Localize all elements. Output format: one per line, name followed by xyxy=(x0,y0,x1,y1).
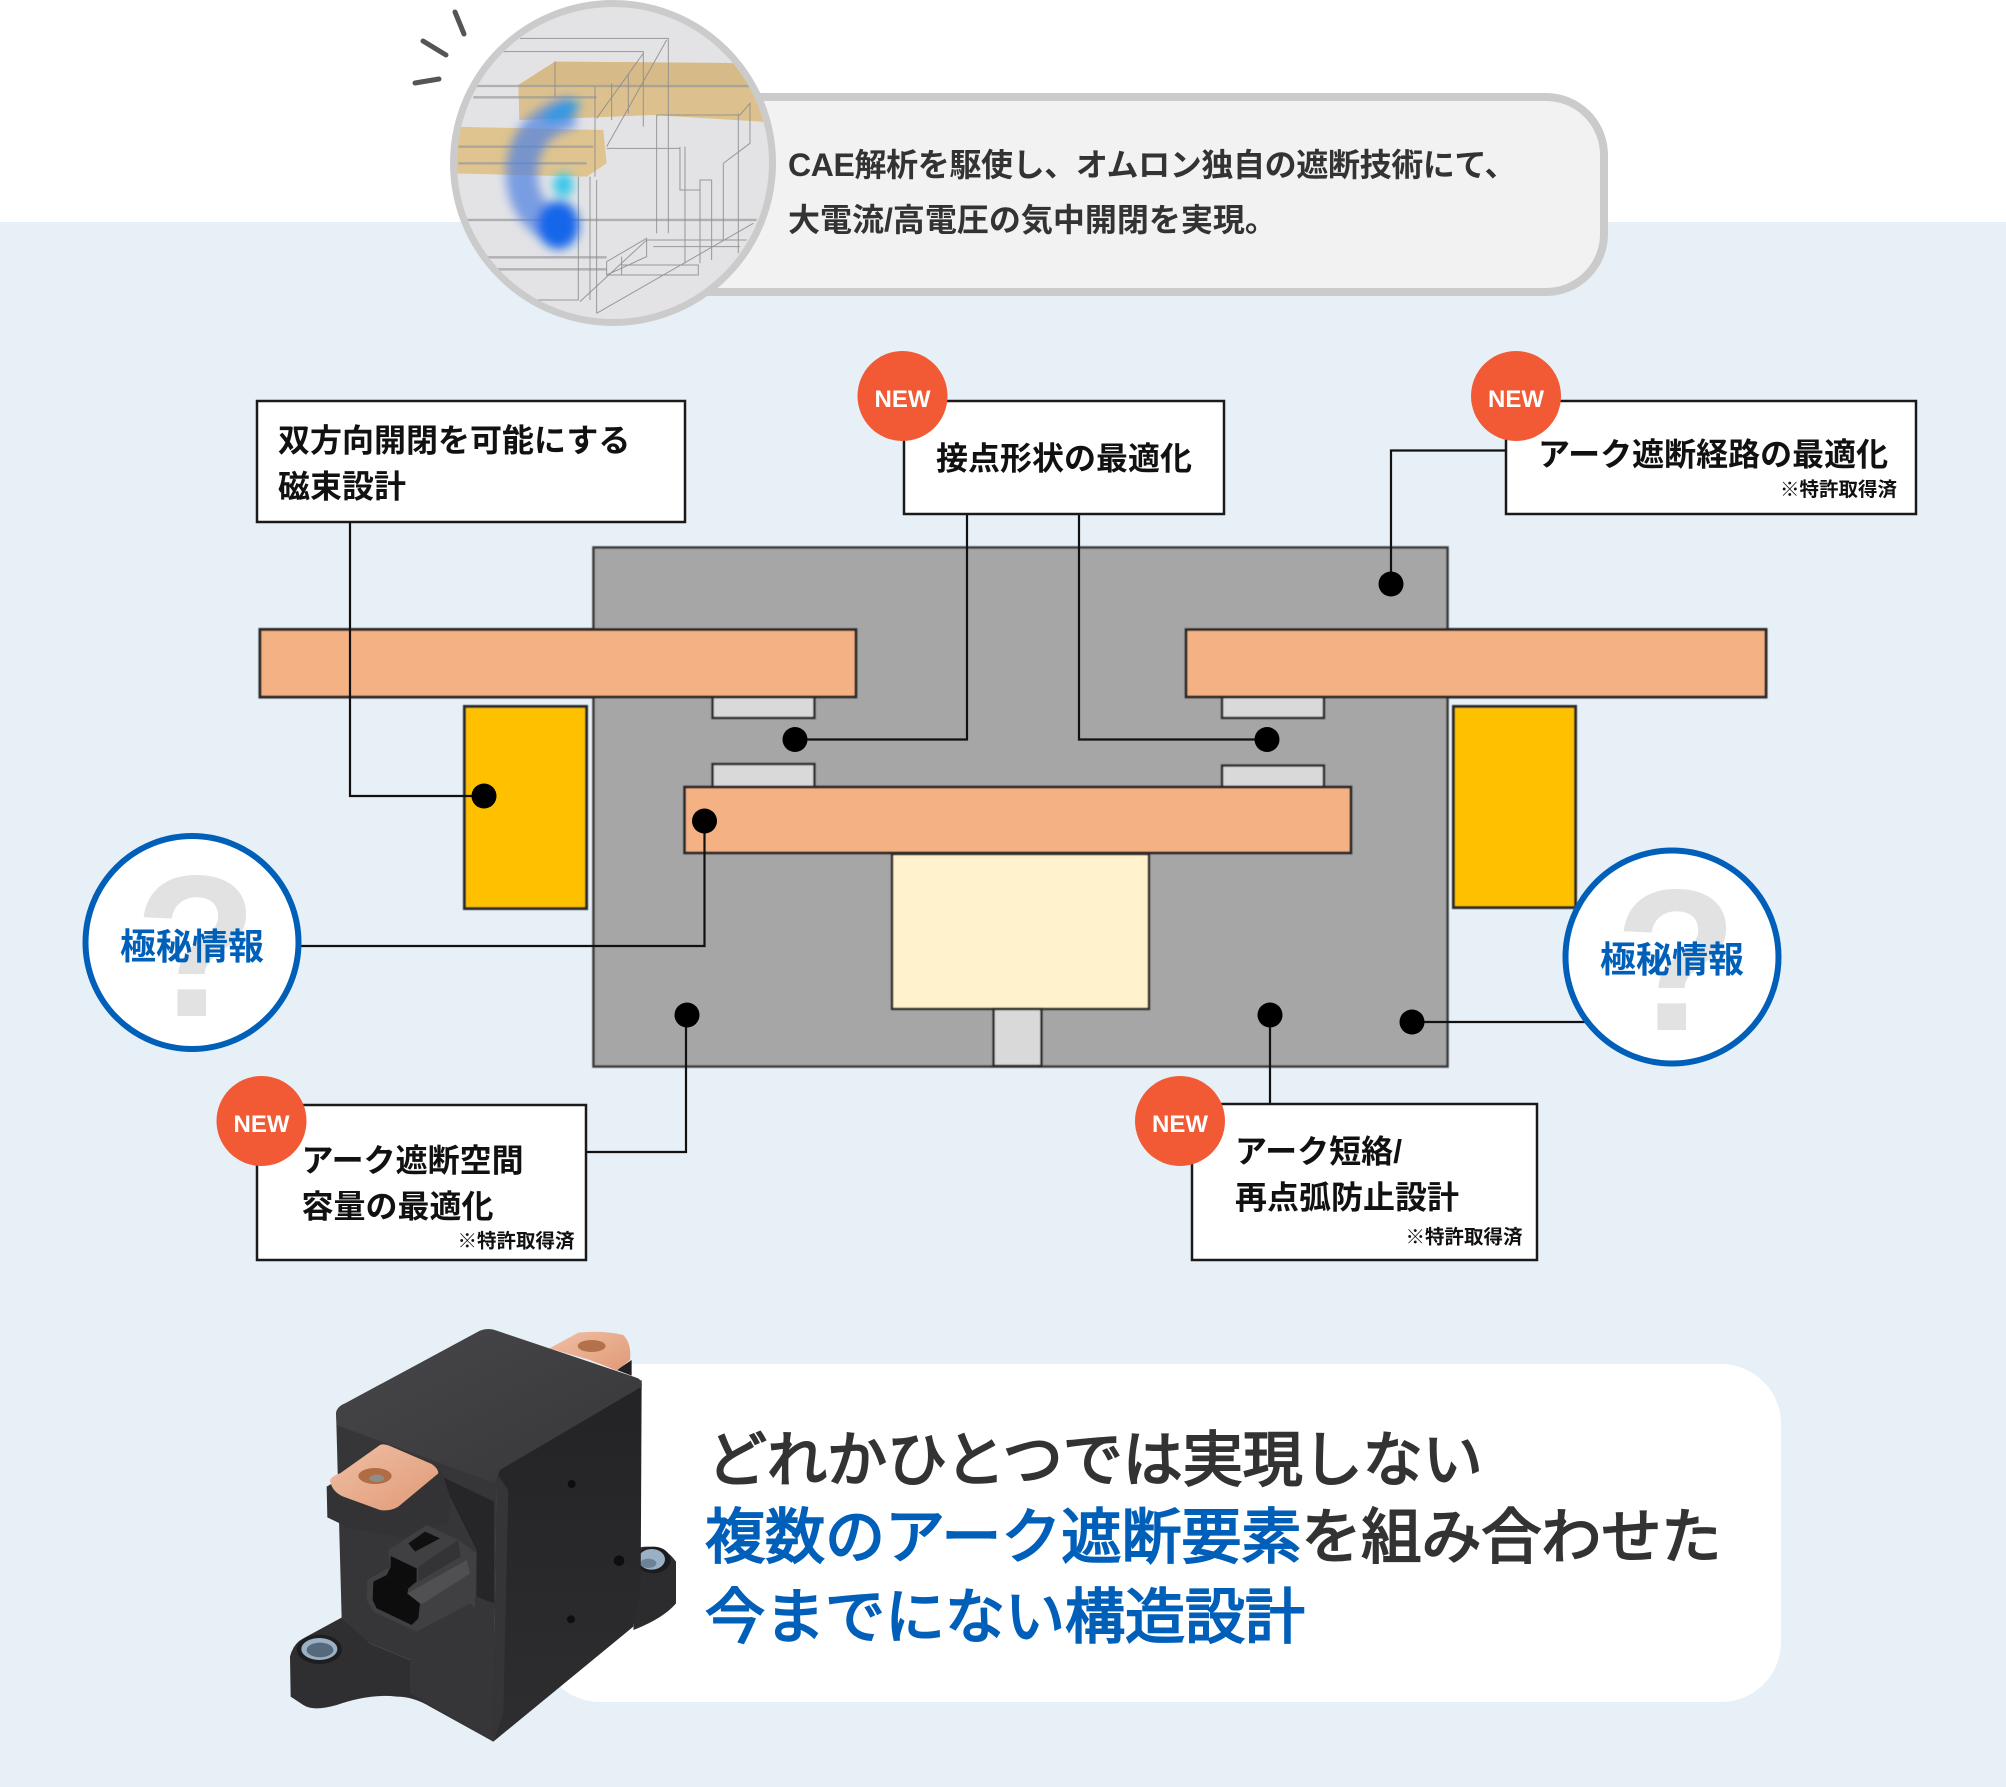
cutaway diagram xyxy=(260,548,1766,1066)
NEW badge: arc path xyxy=(1471,351,1561,441)
summary heading: どれかひとつでは実現しない xyxy=(707,1427,1483,1494)
front face xyxy=(336,1410,497,1742)
moving contact lower left xyxy=(712,764,814,788)
NEW badge: contact shape xyxy=(858,351,948,441)
NEW badge: arc short: NEW xyxy=(1152,1111,1208,1138)
back terminal xyxy=(549,1332,632,1376)
terminal holder xyxy=(327,1453,450,1537)
confidential circle left: ? xyxy=(134,833,258,1059)
label: arc interruption path: アーク遮断経路の最適化 xyxy=(1538,436,1888,472)
confidential circle left: 極秘情報 xyxy=(120,926,264,967)
callout text: CAE解析を駆使し、オムロン独自の遮断技術にて、 xyxy=(788,147,1516,183)
top face xyxy=(336,1329,642,1483)
right face inset panel xyxy=(493,1473,508,1742)
NEW badge: arc space xyxy=(216,1076,306,1166)
NEW badge: arc space: NEW xyxy=(234,1111,290,1138)
label: bidirectional magnetic flux xyxy=(257,401,685,522)
label: arc interruption space: ※特許取得済 xyxy=(458,1230,575,1252)
plunger shaft xyxy=(994,1009,1042,1066)
label: arc short circuit / restrike prevention: 再点弧防止設計 xyxy=(1235,1180,1459,1216)
NEW badge: contact shape: NEW xyxy=(874,386,931,413)
front terminal xyxy=(330,1444,438,1510)
side seam block xyxy=(438,1475,494,1603)
back foot hole xyxy=(636,1547,671,1573)
label: arc short circuit / restrike prevention: アーク短絡/ xyxy=(1235,1134,1402,1170)
callout speech panel xyxy=(620,97,1604,292)
magnet left xyxy=(464,706,586,908)
magnet right xyxy=(1454,706,1576,908)
NEW badge: arc short xyxy=(1135,1076,1225,1166)
summary heading: 今までにない構造設計 xyxy=(705,1584,1305,1651)
label: contact shape: 接点形状の最適化 xyxy=(936,440,1192,476)
callout text xyxy=(788,147,1516,238)
label: arc interruption path: ※特許取得済 xyxy=(1780,478,1898,501)
label: arc short circuit / restrike prevention: ※特許取得済 xyxy=(1406,1226,1523,1248)
summary heading: 複数のアーク遮断要素を組み合わせた xyxy=(705,1504,1721,1571)
label: bidirectional magnetic flux: 双方向開閉を可能にする xyxy=(278,422,630,458)
fixed contact upper left xyxy=(712,697,814,718)
summary heading xyxy=(705,1427,1721,1651)
screw marks xyxy=(567,1480,624,1623)
terminal bar left xyxy=(260,630,856,697)
moving bar xyxy=(684,787,1351,853)
terminal bar right xyxy=(1186,630,1766,697)
fixed contact upper right xyxy=(1222,697,1324,718)
product photo: relay xyxy=(290,1329,676,1742)
label: arc interruption space xyxy=(257,1105,586,1260)
label: contact shape xyxy=(904,401,1224,514)
confidential circle right xyxy=(1566,847,1778,1073)
right face xyxy=(493,1380,642,1742)
plunger block xyxy=(892,854,1149,1009)
label: arc interruption path xyxy=(1506,401,1916,514)
marker dots xyxy=(472,572,1424,1034)
NEW badge: arc path: NEW xyxy=(1488,386,1544,413)
connector xyxy=(367,1525,477,1632)
label: arc interruption space: 容量の最適化 xyxy=(302,1188,494,1224)
confidential circle right: 極秘情報 xyxy=(1600,939,1744,980)
callout text: 大電流/高電圧の気中開閉を実現。 xyxy=(788,202,1277,238)
CAE simulation circle image xyxy=(450,0,780,330)
moving contact lower right xyxy=(1222,766,1324,788)
label: arc short circuit / restrike prevention xyxy=(1192,1104,1537,1260)
summary panel xyxy=(540,1364,1781,1702)
back foot xyxy=(633,1547,676,1630)
label: arc interruption space: アーク遮断空間 xyxy=(302,1142,524,1178)
leader lines xyxy=(300,450,1590,1152)
label: bidirectional magnetic flux: 磁束設計 xyxy=(278,468,406,504)
confidential circle left xyxy=(86,833,298,1059)
confidential circle right: ? xyxy=(1614,847,1738,1073)
left foot xyxy=(290,1617,497,1742)
icon: emphasis ticks xyxy=(415,12,464,83)
relay housing xyxy=(594,548,1448,1066)
callout: CAE analysis xyxy=(415,0,1604,330)
